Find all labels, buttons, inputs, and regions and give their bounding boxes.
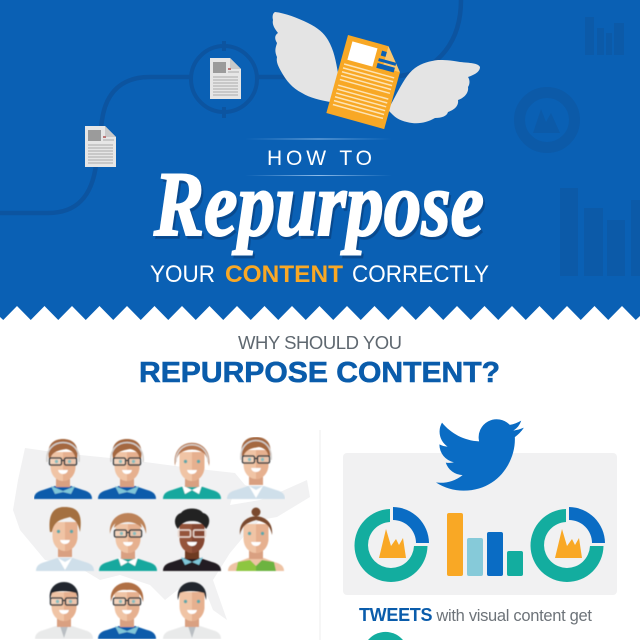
- icon: document left: [85, 126, 116, 167]
- avatar: row 3, person 3: [163, 582, 221, 639]
- map of united states: [13, 448, 310, 620]
- decorative donut: [520, 92, 574, 148]
- icon: twitter bird: [436, 419, 524, 491]
- avatar: row 2, person 1: [36, 507, 94, 571]
- heading: repurpose: Repurpose: [155, 156, 486, 258]
- heading: how to: HOW TO: [267, 147, 372, 170]
- decorative large bar chart: [560, 188, 640, 276]
- icon: document centre: [210, 58, 241, 99]
- route line: [0, 0, 461, 213]
- chart: bar chart: [447, 513, 523, 576]
- stat circle: [368, 632, 403, 640]
- column divider: [320, 430, 321, 640]
- avatar: row 2, person 4: [228, 508, 284, 571]
- circular arrows around document: [191, 41, 257, 118]
- avatar: row 2, person 3: [163, 508, 221, 571]
- chart: donut right: [531, 507, 605, 582]
- heading: repurpose: Repurpose: [153, 153, 484, 255]
- section heading: repurpose content: REPURPOSE CONTENT?: [139, 357, 500, 389]
- subheading: your content correctly: CORRECTLY: [352, 261, 489, 288]
- left wing: [273, 12, 345, 102]
- panel: twitter charts: [343, 453, 617, 595]
- avatar: row 1, person 3: [163, 443, 221, 499]
- orange document: [326, 35, 406, 129]
- right wing: [388, 60, 480, 123]
- avatars: [34, 437, 285, 639]
- avatar: row 1, person 4: [227, 437, 285, 499]
- subheading: your content correctly: [150, 261, 489, 288]
- icon: winged document: [273, 12, 480, 129]
- avatar: row 3, person 2: [98, 582, 156, 639]
- chart: donut left: [355, 507, 429, 582]
- subheading: your content correctly: CONTENT: [225, 261, 343, 288]
- avatar: row 2, person 2: [99, 513, 157, 571]
- header background: [0, 0, 640, 322]
- avatar: row 1, person 2: [98, 439, 156, 499]
- decorative small bar chart: [585, 17, 624, 55]
- avatar: row 1, person 1: [34, 439, 92, 499]
- caption: tweets with visual content: TWEETS with visual content get: [359, 605, 592, 625]
- avatar: row 3, person 1: [35, 582, 93, 639]
- section heading: why should you: WHY SHOULD YOU: [238, 332, 402, 353]
- subheading: your content correctly: YOUR: [150, 261, 215, 288]
